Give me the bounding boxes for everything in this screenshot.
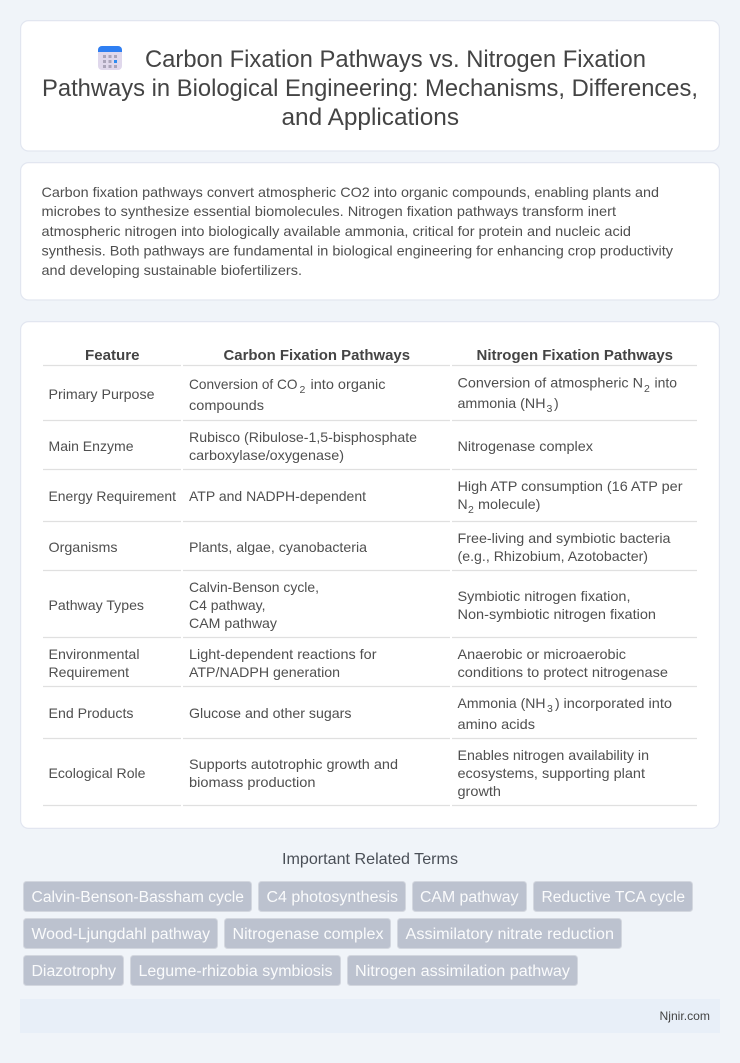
row: environmental requirement: Anaerobic or microaerobic xyxy=(458,646,626,662)
title: Carbon Fixation Pathways vs. Nitrogen Fixation xyxy=(145,46,646,73)
row: energy requirement: N xyxy=(458,496,468,512)
tags: related terms: Diazotrophy xyxy=(32,963,116,980)
heading: important related terms: Important Related Terms xyxy=(282,851,458,868)
row: end products: 3 xyxy=(547,703,553,715)
table header: Carbon Fixation Pathways xyxy=(224,347,410,364)
footer xyxy=(20,999,720,1033)
row: ecological role: Ecological Role xyxy=(48,765,146,781)
tags: related terms: Wood-Ljungdahl pathway xyxy=(32,926,210,943)
row: energy requirement xyxy=(48,478,683,516)
row: organisms xyxy=(48,530,671,564)
table header xyxy=(85,347,673,364)
row: primary purpose: Conversion of atmospheric N xyxy=(458,374,643,390)
row: pathway types: CAM pathway xyxy=(189,615,277,631)
row: organisms: Organisms xyxy=(48,539,118,555)
row: ecological role: growth xyxy=(458,783,501,799)
text block: summary paragraph xyxy=(42,184,673,278)
row: primary purpose: ) xyxy=(554,395,559,411)
row: main enzyme xyxy=(48,429,593,463)
row: primary purpose xyxy=(48,374,677,415)
tags: related terms: CAM pathway xyxy=(420,889,519,906)
row: ecological role: biomass production xyxy=(189,774,316,790)
row: main enzyme: carboxylase/oxygenase) xyxy=(189,447,344,463)
row: primary purpose: compounds xyxy=(189,397,264,413)
row: ecological role: ecosystems, supporting plant xyxy=(458,765,645,781)
row: primary purpose: 2 xyxy=(644,383,650,395)
row: environmental requirement: conditions to protect nitrogenase xyxy=(458,664,668,680)
tags: related terms: Assimilatory nitrate reduction xyxy=(406,926,614,943)
panel: summary xyxy=(21,163,719,300)
panel: comparison table xyxy=(21,322,719,828)
tags: related terms: Reductive TCA cycle xyxy=(542,889,685,906)
text block: summary paragraph: synthesis. Both pathways are fundamental in biological engineering for enhancing crop productivity xyxy=(42,242,673,258)
row: pathway types: C4 pathway, xyxy=(189,597,266,613)
row: energy requirement: 2 xyxy=(468,504,474,516)
row: organisms: Free-living and symbiotic bacteria xyxy=(458,530,671,546)
row: ecological role: Enables nitrogen availability in xyxy=(458,747,649,763)
row: energy requirement: molecule) xyxy=(478,496,540,512)
row: end products: End Products xyxy=(48,705,134,721)
row: environmental requirement xyxy=(48,646,668,680)
row: environmental requirement: Environmental xyxy=(48,646,140,662)
row: environmental requirement: Requirement xyxy=(48,664,129,680)
title: Pathways in Biological Engineering: Mechanisms, Differences, xyxy=(42,75,698,102)
tags: related terms: C4 photosynthesis xyxy=(266,889,398,906)
text block: summary paragraph: Carbon fixation pathways convert atmospheric CO2 into organic compounds, enabling plants and xyxy=(42,184,659,200)
row: pathway types: Symbiotic nitrogen fixation, xyxy=(458,588,630,604)
text block: summary paragraph: atmospheric nitrogen into biologically available ammonia, critical for protein and nucleic acid xyxy=(42,223,631,239)
row: organisms: Plants, algae, cyanobacteria xyxy=(189,539,367,555)
title xyxy=(42,46,698,131)
row: environmental requirement: ATP/NADPH generation xyxy=(189,664,340,680)
row: end products: amino acids xyxy=(458,716,535,732)
row: pathway types: Pathway Types xyxy=(48,597,144,613)
table header: Nitrogen Fixation Pathways xyxy=(476,347,673,364)
row: primary purpose: ammonia (NH xyxy=(458,395,546,411)
row: ecological role: Supports autotrophic growth and xyxy=(189,756,398,772)
row: end products xyxy=(48,695,672,732)
row: end products: incorporated into xyxy=(564,695,672,711)
tags: related terms: Legume-rhizobia symbiosis xyxy=(138,963,333,980)
row: pathway types xyxy=(48,579,656,631)
row: main enzyme: Nitrogenase complex xyxy=(458,438,593,454)
icon: calendar xyxy=(98,46,122,70)
title: and Applications xyxy=(282,104,459,131)
row: primary purpose: 2 xyxy=(300,384,306,396)
row: main enzyme: Rubisco (Ribulose-1,5-bisphosphate xyxy=(189,429,417,445)
row: primary purpose: into xyxy=(654,374,677,390)
row: energy requirement: ATP and NADPH-dependent xyxy=(189,488,366,504)
row: primary purpose: Primary Purpose xyxy=(48,386,155,402)
row: primary purpose: 3 xyxy=(546,403,552,415)
row: primary purpose: Conversion of CO xyxy=(189,376,298,392)
row: ecological role xyxy=(48,747,649,799)
table header: Feature xyxy=(85,347,140,364)
tags: related terms xyxy=(24,882,692,986)
row: environmental requirement: Light-dependent reactions for xyxy=(189,646,377,662)
row: primary purpose: into organic xyxy=(310,376,386,392)
row: pathway types: Calvin-Benson cycle, xyxy=(189,579,319,595)
row: energy requirement: High ATP consumption (16 ATP per xyxy=(458,478,683,494)
row: pathway types: Non-symbiotic nitrogen fixation xyxy=(458,606,656,622)
panel: title card xyxy=(21,21,719,151)
tags: related terms: Nitrogen assimilation pathway xyxy=(355,963,570,980)
row: energy requirement: Energy Requirement xyxy=(48,488,176,504)
footer: Njnir.com xyxy=(660,1009,710,1023)
row: end products: ) xyxy=(555,695,560,711)
row: organisms: (e.g., Rhizobium, Azotobacter) xyxy=(458,548,648,564)
row: end products: Ammonia (NH xyxy=(458,695,546,711)
tags: related terms: Calvin-Benson-Bassham cycle xyxy=(32,889,244,906)
row: main enzyme: Main Enzyme xyxy=(48,438,134,454)
tags: related terms: Nitrogenase complex xyxy=(232,926,384,943)
text block: summary paragraph: and developing sustainable biofertilizers. xyxy=(42,262,302,278)
text block: summary paragraph: microbes to synthesize essential biomolecules. Nitrogen fixation pathways transform inert xyxy=(42,203,616,219)
row: end products: Glucose and other sugars xyxy=(189,705,352,721)
